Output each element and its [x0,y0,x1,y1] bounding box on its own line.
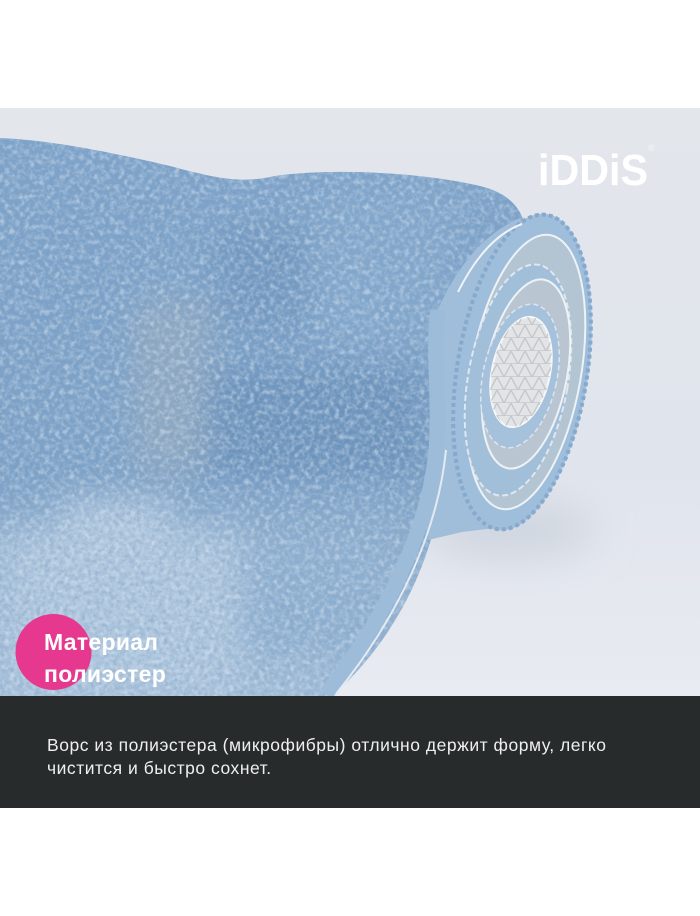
logo: IDDIS: ® [648,143,655,153]
rug stitched edge [326,310,438,694]
rug body [0,120,560,696]
outer roll layer [432,204,612,540]
product photo: rolled blue bath mat [0,108,700,696]
badge text: Материал [44,629,158,655]
caption text [47,735,607,778]
caption text: чистится и быстро сохнет. [47,758,272,778]
logo: IDDIS: iDDiS [538,146,648,195]
photo background [0,108,700,696]
caption panel [0,696,700,808]
caption text: Ворс из полиэстера (микрофибры) отлично держит форму, легко [47,735,607,755]
second roll layer [448,256,588,504]
pink circle [16,614,92,690]
third roll layer [469,297,571,455]
stitching on roll flank [458,224,522,292]
roll end with concentric layers [451,212,593,532]
badge text: полиэстер [44,661,166,687]
material badge [16,614,166,690]
inner core with rubber backing [481,311,561,433]
roll flank joining rug to roll [428,218,520,540]
floor shadow under roll [425,502,595,558]
